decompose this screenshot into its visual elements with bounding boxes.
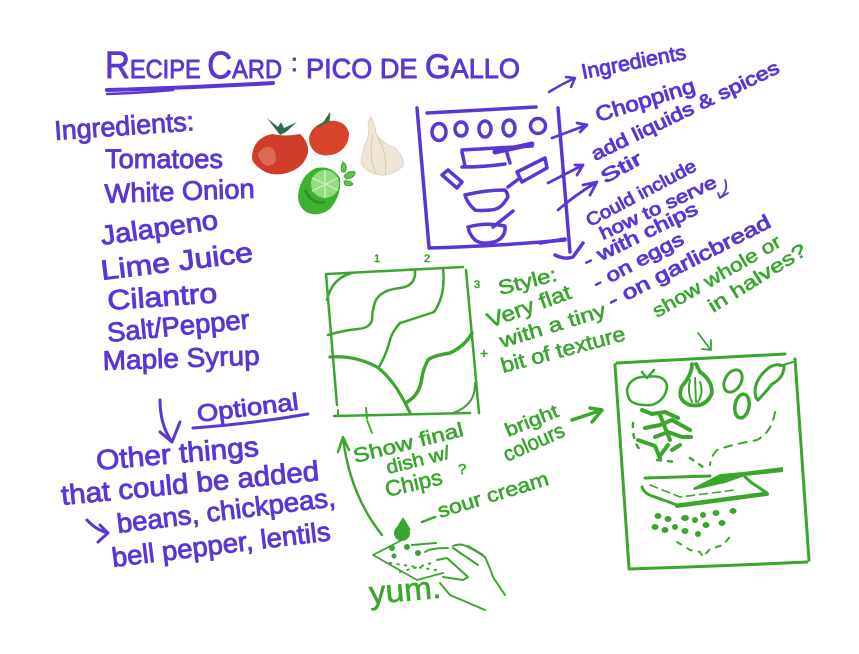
purple arrows and method notes: Could include	[582, 156, 700, 231]
ingredient list: White Onion	[104, 174, 255, 209]
title	[105, 45, 520, 94]
bowl with liquid	[465, 190, 508, 210]
ingredient list: Cilantro	[106, 277, 218, 316]
icon: tomato small	[309, 113, 349, 155]
purple arrows and method notes	[540, 41, 783, 312]
optional heading	[160, 389, 308, 442]
drawing: chip held in hand: yum.	[367, 569, 442, 611]
ingredient list: Tomatoes	[105, 144, 223, 174]
chopped pieces	[652, 508, 736, 537]
note: final dish with chips: dish w/	[384, 443, 453, 479]
tomato sketch	[627, 370, 667, 405]
ingredient list: Maple Syrup	[102, 341, 260, 376]
cilantro cluster	[633, 410, 703, 467]
purple arrows and method notes: - on eggs	[589, 229, 688, 294]
onion sketch	[680, 364, 712, 406]
style notes: bit of texture	[498, 322, 628, 378]
layout sketch: wavy panels: 3	[474, 279, 480, 291]
ingredient list: Lime Juice	[99, 237, 255, 286]
note: show whole or in halves: in halves?	[705, 240, 811, 317]
ingredient list: Jalapeno	[99, 205, 220, 251]
purple arrows and method notes: Stir	[597, 148, 647, 188]
style notes: with a tiny	[496, 300, 609, 353]
purple arrows and method notes: - on garlicbread	[604, 211, 775, 312]
note: final dish with chips: ?	[458, 461, 466, 478]
note: bright colours	[500, 401, 602, 467]
purple arrows and method notes: - with chips	[580, 199, 702, 272]
ingredient list: Salt/Pepper	[106, 304, 251, 348]
style notes: Style:	[496, 264, 559, 300]
note: sour cream: sour cream	[435, 468, 551, 523]
dotted path	[710, 412, 775, 465]
layout sketch: wavy panels: 1	[374, 253, 380, 265]
optional additions text	[60, 431, 337, 573]
layout sketch: wavy panels: 2	[424, 253, 430, 265]
note: show whole or in halves: show whole or	[649, 231, 786, 322]
note: final dish with chips	[338, 419, 466, 535]
bowl with spoon	[468, 211, 513, 243]
note: show whole or in halves	[649, 231, 811, 350]
chopping board and knife	[462, 144, 532, 167]
icon: tomato large	[252, 118, 308, 174]
style notes: Very flat	[484, 281, 575, 333]
layout sketch: wavy panels	[326, 253, 480, 418]
cup of liquid pouring	[442, 158, 547, 188]
purple arrows and method notes: add liquids & spices	[588, 58, 783, 166]
optional additions text: beans, chickpeas,	[115, 482, 337, 539]
purple arrows and method notes: Ingredients	[580, 41, 688, 84]
cutting board with knife	[642, 467, 783, 506]
storyboard sketch: method panel	[417, 107, 570, 252]
optional additions text: Other things	[95, 431, 260, 476]
ingredient list	[53, 106, 260, 376]
ingredient list: Ingredients:	[53, 106, 195, 146]
purple arrows and method notes: how to serve	[596, 172, 720, 244]
optional heading: Optional	[195, 389, 300, 428]
note: final dish with chips: Chips	[383, 464, 445, 502]
note: final dish with chips: Show final	[351, 419, 466, 468]
optional additions text: bell pepper, lentils	[110, 516, 332, 573]
drawing: chip held in hand	[367, 517, 505, 611]
illustration sketch: ingredients to chopping board	[615, 354, 809, 569]
icon: garlic bulb	[361, 117, 403, 175]
note: bright colours: colours	[500, 419, 568, 467]
style notes	[480, 264, 628, 378]
title: PICO DE GALLO	[306, 48, 520, 86]
style notes: +	[480, 345, 488, 361]
optional additions text: that could be added	[60, 455, 320, 511]
ingredient circles	[432, 118, 546, 140]
note: bright colours: bright	[502, 401, 563, 442]
sliced jalapeno pieces	[720, 362, 793, 419]
title: RECIPE CARD	[105, 45, 282, 87]
purple arrows and method notes: Chopping	[593, 75, 698, 127]
title: :	[291, 50, 298, 77]
icon: lime	[298, 162, 355, 214]
